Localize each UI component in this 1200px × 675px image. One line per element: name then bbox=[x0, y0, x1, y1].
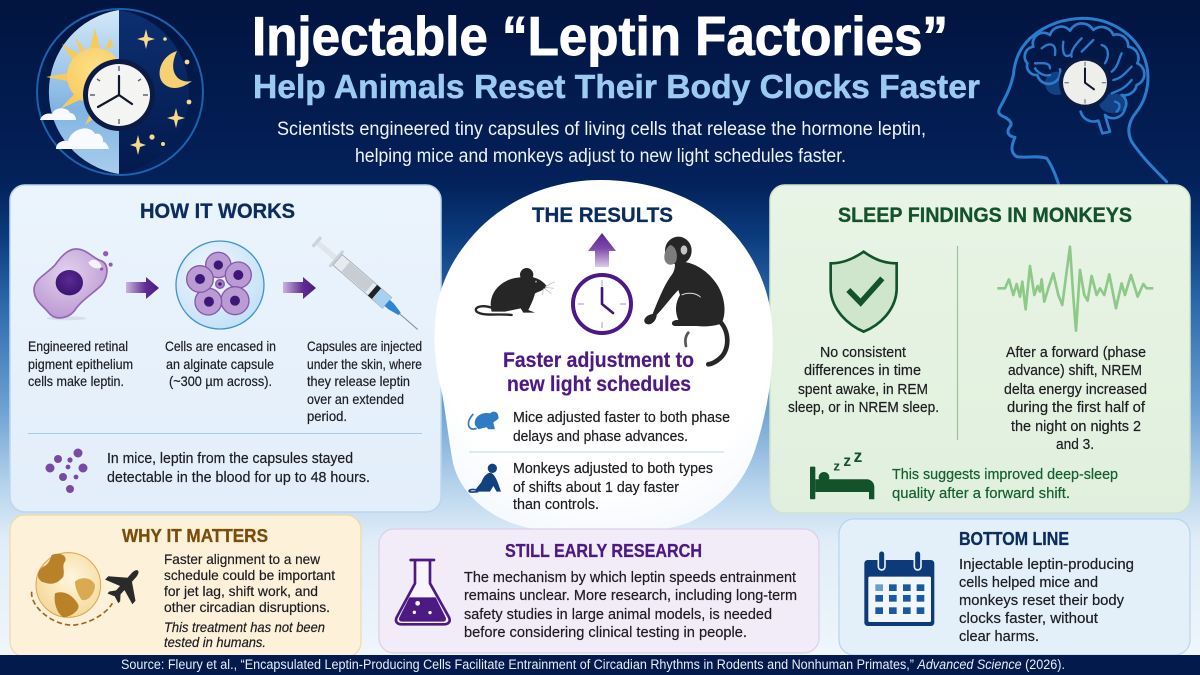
step 1 text bbox=[28, 339, 133, 389]
monkey result text: Monkeys adjusted to both types bbox=[513, 461, 713, 477]
right text: After a forward (phase bbox=[1006, 345, 1146, 361]
why it matters text: This treatment has not been bbox=[164, 620, 325, 635]
white blob bbox=[434, 180, 773, 533]
why it matters text: schedule could be important bbox=[164, 568, 335, 583]
icon: syringe bbox=[309, 233, 425, 338]
right text: the night on nights 2 bbox=[1011, 419, 1141, 435]
intro text: helping mice and monkeys adjust to new light schedules faster. bbox=[355, 146, 846, 167]
panel background bbox=[10, 515, 361, 657]
panel: bottom line bbox=[839, 519, 1190, 655]
head outline bbox=[999, 18, 1167, 183]
subheading: new light schedules bbox=[507, 373, 691, 396]
panel: how it works bbox=[10, 185, 441, 512]
step 2 text bbox=[165, 339, 276, 389]
icon: bed: z bbox=[843, 453, 851, 470]
intro text: Scientists engineered tiny capsules of living cells that release the hormone leptin, bbox=[277, 119, 926, 140]
icon: globe and plane bbox=[32, 553, 152, 625]
left text: differences in time bbox=[804, 363, 921, 379]
step 3 text: over an extended bbox=[307, 392, 404, 407]
step 1 text: cells make leptin. bbox=[28, 374, 124, 389]
step 3 text: Capsules are injected bbox=[307, 339, 422, 354]
research text bbox=[464, 570, 797, 641]
footer source: Source: Fleury et al., “Encapsulated Leptin-Producing Cells Facilitate Entrainment of Circadian Rhythms in Rodents and Nonhuman Primates,” Advanced Science (2026). bbox=[121, 657, 1065, 672]
brain outline bbox=[1025, 23, 1144, 133]
panel: why it matters bbox=[10, 515, 361, 657]
brain folds bbox=[1035, 38, 1132, 112]
right text: during the first half of bbox=[1007, 400, 1146, 416]
heading: WHY IT MATTERS bbox=[122, 526, 268, 546]
panel: sleep findings in monkeys bbox=[770, 185, 1190, 513]
panel background bbox=[10, 185, 441, 512]
moon bbox=[160, 51, 192, 88]
step 1 text: Engineered retinal bbox=[28, 339, 128, 354]
heading: BOTTOM LINE bbox=[959, 529, 1069, 549]
why it matters text: for jet lag, shift work, and bbox=[164, 584, 318, 599]
clock bbox=[1059, 57, 1111, 109]
left text: spent awake, in REM bbox=[798, 382, 928, 398]
icon: brain head clock bbox=[999, 18, 1167, 183]
leptin duration text: In mice, leptin from the capsules stayed bbox=[107, 450, 353, 467]
subtitle: Help Animals Reset Their Body Clocks Faster bbox=[253, 69, 980, 106]
icon: bed bbox=[810, 446, 874, 499]
clouds bbox=[40, 108, 109, 149]
intro text bbox=[277, 119, 926, 167]
step 3 text: they release leptin bbox=[307, 374, 410, 389]
arrow bbox=[126, 277, 159, 299]
sun bbox=[46, 28, 123, 125]
icon: engineered cell bbox=[34, 249, 113, 320]
temporal lobe fill bbox=[1045, 72, 1068, 95]
panel: the results bbox=[434, 180, 773, 533]
icon: small monkey bbox=[469, 464, 501, 492]
research text: remains unclear. More research, including long-term bbox=[464, 588, 797, 604]
research text: before considering clinical testing in people. bbox=[464, 625, 747, 641]
stars bbox=[130, 29, 191, 155]
panel background bbox=[770, 185, 1190, 513]
heading: HOW IT WORKS bbox=[140, 200, 295, 223]
right text: delta energy increased bbox=[1004, 382, 1147, 398]
monkey result text: of shifts about 1 day faster bbox=[513, 480, 679, 496]
heading: STILL EARLY RESEARCH bbox=[505, 541, 702, 561]
monkey result text: than controls. bbox=[513, 497, 599, 513]
step 3 text: period. bbox=[307, 409, 347, 424]
research text: The mechanism by which leptin speeds entrainment bbox=[464, 570, 796, 586]
subheading: Faster adjustment to bbox=[503, 349, 694, 372]
icon: mouse bbox=[476, 268, 555, 315]
step 3 text: under the skin, where bbox=[307, 357, 422, 372]
step 1 text: pigment epithelium bbox=[28, 357, 133, 372]
panel background bbox=[379, 529, 819, 653]
arrow bbox=[283, 277, 316, 299]
footer source bbox=[0, 655, 1200, 675]
night half bbox=[119, 10, 189, 174]
step 3 text bbox=[307, 339, 422, 424]
mice result text: Mice adjusted faster to both phase bbox=[513, 410, 730, 426]
day half bbox=[49, 10, 119, 174]
left text bbox=[788, 345, 939, 416]
right text: and 3. bbox=[1056, 437, 1094, 453]
why it matters text: other circadian disruptions. bbox=[164, 600, 330, 615]
icon: alginate capsule bbox=[176, 241, 264, 329]
icon: leptin dots bbox=[46, 448, 88, 493]
right text bbox=[1004, 345, 1147, 453]
conclusion text: quality after a forward shift. bbox=[892, 486, 1070, 502]
research text: safety studies in large animal models, is needed bbox=[464, 607, 772, 623]
icon: monkey bbox=[644, 237, 727, 364]
clock bbox=[83, 59, 155, 131]
icon: bed: z bbox=[854, 446, 863, 466]
bottom line text bbox=[959, 557, 1134, 645]
icon: flask bbox=[396, 560, 450, 624]
chart: delta wave bbox=[997, 247, 1153, 331]
leptin duration text bbox=[107, 450, 370, 486]
step 2 text: an alginate capsule bbox=[166, 357, 274, 372]
icon: small mouse bbox=[469, 412, 499, 429]
why it matters text: tested in humans. bbox=[164, 635, 266, 650]
icon: day and night clock bbox=[37, 9, 203, 175]
bottom line text: monkeys reset their body bbox=[959, 593, 1125, 609]
bottom line text: clocks faster, without bbox=[959, 611, 1098, 627]
icon: calendar bbox=[864, 551, 934, 626]
step 2 text: (~300 µm across). bbox=[169, 374, 272, 389]
bottom line text: cells helped mice and bbox=[959, 575, 1098, 591]
conclusion text bbox=[892, 467, 1118, 502]
title: Injectable “Leptin Factories” bbox=[252, 5, 948, 67]
icon: shield bbox=[831, 252, 897, 332]
plane bbox=[99, 558, 152, 611]
right text: advance) shift, NREM bbox=[1008, 363, 1142, 379]
monkey result text bbox=[513, 461, 713, 513]
left text: No consistent bbox=[820, 345, 906, 361]
panel background bbox=[839, 519, 1190, 655]
why it matters text bbox=[164, 552, 335, 650]
conclusion text: This suggests improved deep-sleep bbox=[892, 467, 1118, 483]
bottom line text: Injectable leptin-producing bbox=[959, 557, 1134, 573]
panel: still early research bbox=[379, 529, 819, 653]
subheading bbox=[503, 349, 694, 396]
mice result text: delays and phase advances. bbox=[513, 429, 688, 445]
left text: sleep, or in NREM sleep. bbox=[788, 400, 939, 416]
arrow up bbox=[588, 233, 616, 267]
why it matters text: Faster alignment to a new bbox=[164, 552, 320, 567]
bottom line text: clear harms. bbox=[959, 629, 1039, 645]
mice result text bbox=[513, 410, 730, 445]
icon: clock bbox=[573, 275, 631, 333]
heading: THE RESULTS bbox=[532, 204, 673, 227]
step 2 text: Cells are encased in bbox=[165, 339, 276, 354]
leptin duration text: detectable in the blood for up to 48 hours. bbox=[107, 469, 370, 486]
heading: SLEEP FINDINGS IN MONKEYS bbox=[838, 204, 1132, 227]
icon: bed: z bbox=[833, 459, 840, 474]
